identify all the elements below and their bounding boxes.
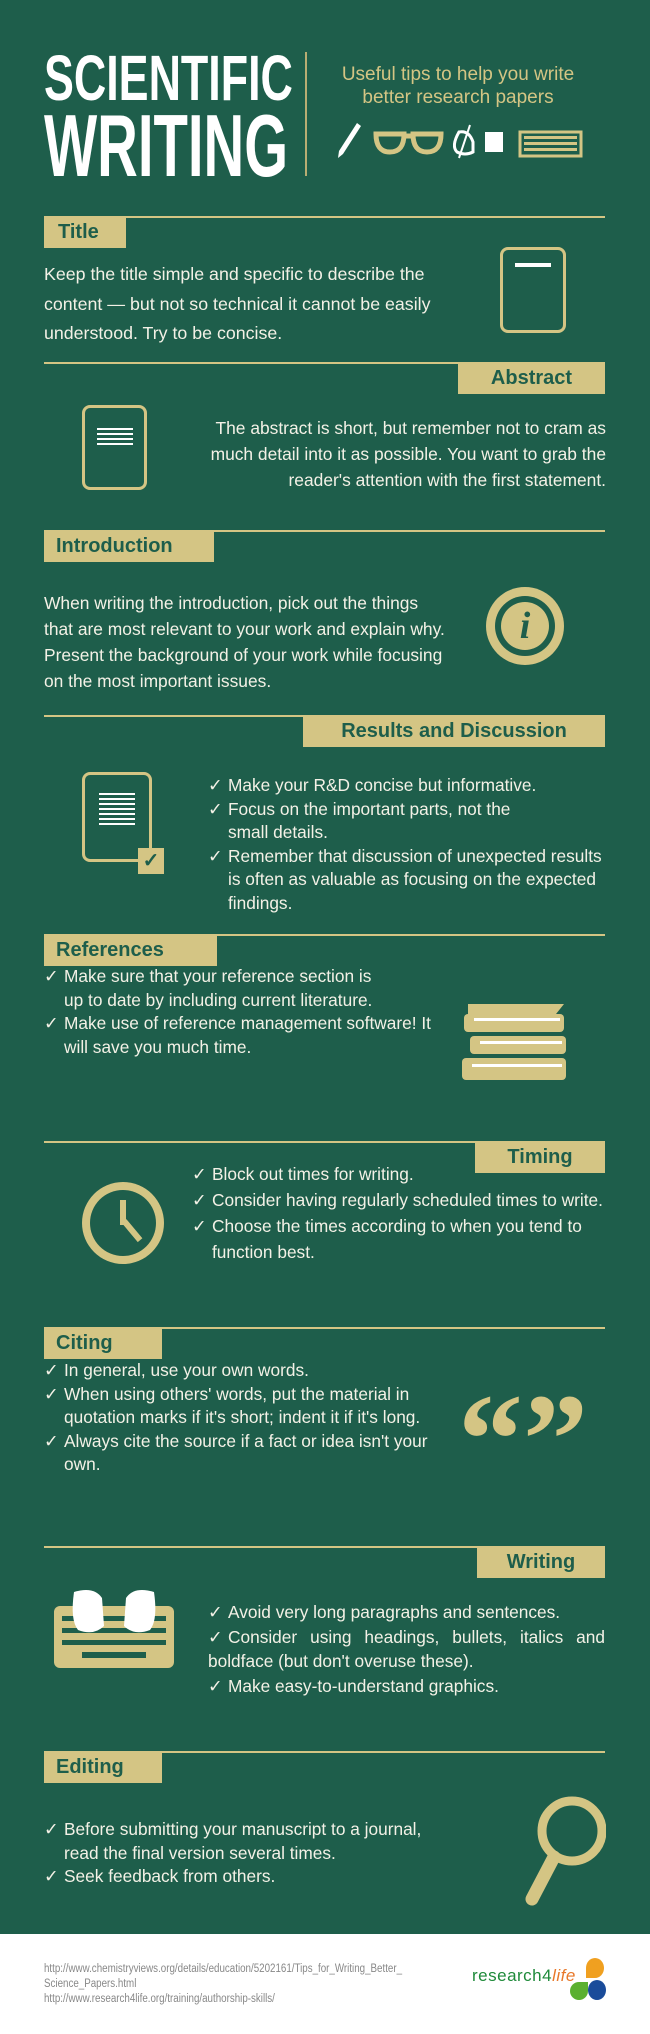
label: Title: [44, 216, 126, 248]
checklist: will save you much time.: [64, 1036, 251, 1056]
checklist: function best.: [212, 1242, 315, 1262]
checklist: ✓: [44, 966, 58, 986]
text block: content — but not so technical it cannot be easily: [44, 294, 430, 314]
label: Results and Discussion: Results and Discussion: [341, 720, 567, 742]
icon: info: i: [520, 605, 530, 647]
label: Abstract: Abstract: [491, 367, 572, 389]
text block: Present the background of your work while focusing: [44, 645, 442, 665]
label: Editing: Editing: [56, 1756, 124, 1778]
logo: research4life: [472, 1958, 606, 2000]
checklist: Consider having regularly scheduled times to write.: [212, 1190, 603, 1210]
text block: reader's attention with the first statement.: [289, 470, 606, 490]
label: Timing: [475, 1141, 605, 1173]
label: Results and Discussion: [303, 715, 605, 747]
label: Writing: Writing: [507, 1551, 575, 1573]
icon: title page: [500, 247, 566, 333]
icon: glasses: [376, 134, 441, 152]
checklist: [44, 1819, 421, 1886]
checklist: quotation marks if it's short; indent it if it's long.: [64, 1407, 420, 1427]
checklist: Remember that discussion of unexpected results: [228, 846, 602, 866]
text block: Keep the title simple and specific to describe the: [44, 264, 425, 284]
checklist: Avoid very long paragraphs and sentences.: [228, 1602, 560, 1622]
text block: [44, 593, 445, 691]
text block: [44, 264, 430, 343]
title: SCIENTIFIC: [44, 42, 293, 114]
header icons: [338, 123, 582, 158]
panel: title: [44, 216, 605, 343]
footer sources: http://www.research4life.org/training/authorship-skills/: [44, 1993, 275, 2005]
subtitle: [342, 64, 574, 108]
icon: magnifier: [526, 1796, 606, 1906]
checklist: [192, 1164, 603, 1262]
footer sources: http://www.chemistryviews.org/details/education/5202161/Tips_for_Writing_Better_: [44, 1963, 402, 1975]
checklist: own.: [64, 1454, 101, 1474]
label: Introduction: Introduction: [56, 535, 173, 557]
subtitle: better research papers: [362, 87, 554, 108]
label: Timing: Timing: [507, 1146, 573, 1168]
label: Citing: Citing: [56, 1332, 113, 1354]
label: References: References: [56, 939, 164, 961]
label: Abstract: [458, 362, 605, 394]
label: Introduction: [44, 530, 214, 562]
checklist: is often as valuable as focusing on the expected: [228, 869, 596, 889]
label: Citing: [44, 1327, 162, 1359]
checklist: Always cite the source if a fact or idea isn't your: [64, 1430, 428, 1450]
checklist: ✓: [192, 1190, 206, 1210]
text block: [211, 418, 606, 490]
icon: keyboard: [520, 132, 581, 156]
checklist: ✓: [192, 1164, 206, 1184]
icon: checked document: ✓: [143, 850, 159, 872]
checklist: ✓: [44, 1430, 58, 1450]
checklist: ✓: [208, 1676, 222, 1696]
checklist: read the final version several times.: [64, 1842, 336, 1862]
checklist: Block out times for writing.: [212, 1164, 414, 1184]
subtitle: Useful tips to help you write: [342, 64, 574, 85]
checklist: Focus on the important parts, not the: [228, 798, 510, 818]
checklist: ✓: [44, 1866, 58, 1886]
panel: citing: [44, 1327, 605, 1512]
checklist: [44, 1360, 428, 1474]
checklist: [208, 1602, 605, 1696]
icon: abstract page: [82, 405, 147, 490]
checklist: In general, use your own words.: [64, 1360, 309, 1380]
icon: typing hands on keyboard: [54, 1590, 174, 1668]
checklist: Choose the times according to when you tend to: [212, 1216, 582, 1236]
label: Title: Title: [58, 221, 99, 243]
checklist: [44, 966, 431, 1056]
checklist: ✓: [192, 1216, 206, 1236]
footer sources: [44, 1963, 402, 2005]
checklist: Make your R&D concise but informative.: [228, 775, 536, 795]
text block: The abstract is short, but remember not to cram as: [216, 418, 606, 438]
checklist: Before submitting your manuscript to a journal,: [64, 1819, 421, 1839]
icon: hand writing: [454, 125, 503, 158]
label: References: [44, 934, 217, 966]
checklist: up to date by including current literature.: [64, 990, 372, 1010]
checklist: Make sure that your reference section is: [64, 966, 371, 986]
text block: When writing the introduction, pick out the things: [44, 593, 418, 613]
checklist: Consider using headings, bullets, italics and boldface (but don't overuse these).: [208, 1627, 605, 1671]
checklist: ✓: [208, 775, 222, 795]
label: Writing: [477, 1546, 605, 1578]
icon: info: [486, 587, 564, 665]
panel: results and discussion: [44, 715, 605, 912]
checklist: Make easy-to-understand graphics.: [228, 1676, 499, 1696]
checklist: ✓: [208, 1602, 222, 1622]
icon: books: [462, 1004, 566, 1080]
icon: clock: [82, 1182, 164, 1264]
panel: introduction: [44, 530, 605, 691]
checklist: ✓: [208, 1627, 222, 1647]
checklist: ✓: [44, 1819, 58, 1839]
panel: editing: [44, 1751, 606, 1906]
footer sources: Science_Papers.html: [44, 1978, 136, 1990]
checklist: small details.: [228, 822, 328, 842]
checklist: ✓: [208, 846, 222, 866]
text block: understood. Try to be concise.: [44, 323, 282, 343]
checklist: Make use of reference management software! It: [64, 1013, 431, 1033]
icon: quotation marks: “”: [458, 1368, 588, 1512]
checklist: findings.: [228, 892, 292, 912]
title: [44, 42, 293, 195]
panel: references: [44, 934, 605, 1080]
checklist: ✓: [44, 1013, 58, 1033]
text block: much detail into it as possible. You want to grab the: [211, 444, 606, 464]
panel: timing: [44, 1141, 605, 1264]
panel: writing: [44, 1546, 605, 1696]
checklist: When using others' words, put the material in: [64, 1384, 409, 1404]
checklist: [208, 775, 602, 912]
label: Editing: [44, 1751, 162, 1783]
icon: pen: [338, 123, 361, 158]
checklist: ✓: [44, 1384, 58, 1404]
panel: abstract: [44, 362, 606, 490]
checklist: Seek feedback from others.: [64, 1866, 275, 1886]
checklist: ✓: [208, 798, 222, 818]
text block: that are most relevant to your work and explain why.: [44, 619, 445, 639]
logo: research4life: research4life: [472, 1966, 576, 1985]
checklist: ✓: [44, 1360, 58, 1380]
title: WRITING: [44, 96, 288, 195]
text block: on the most important issues.: [44, 671, 271, 691]
